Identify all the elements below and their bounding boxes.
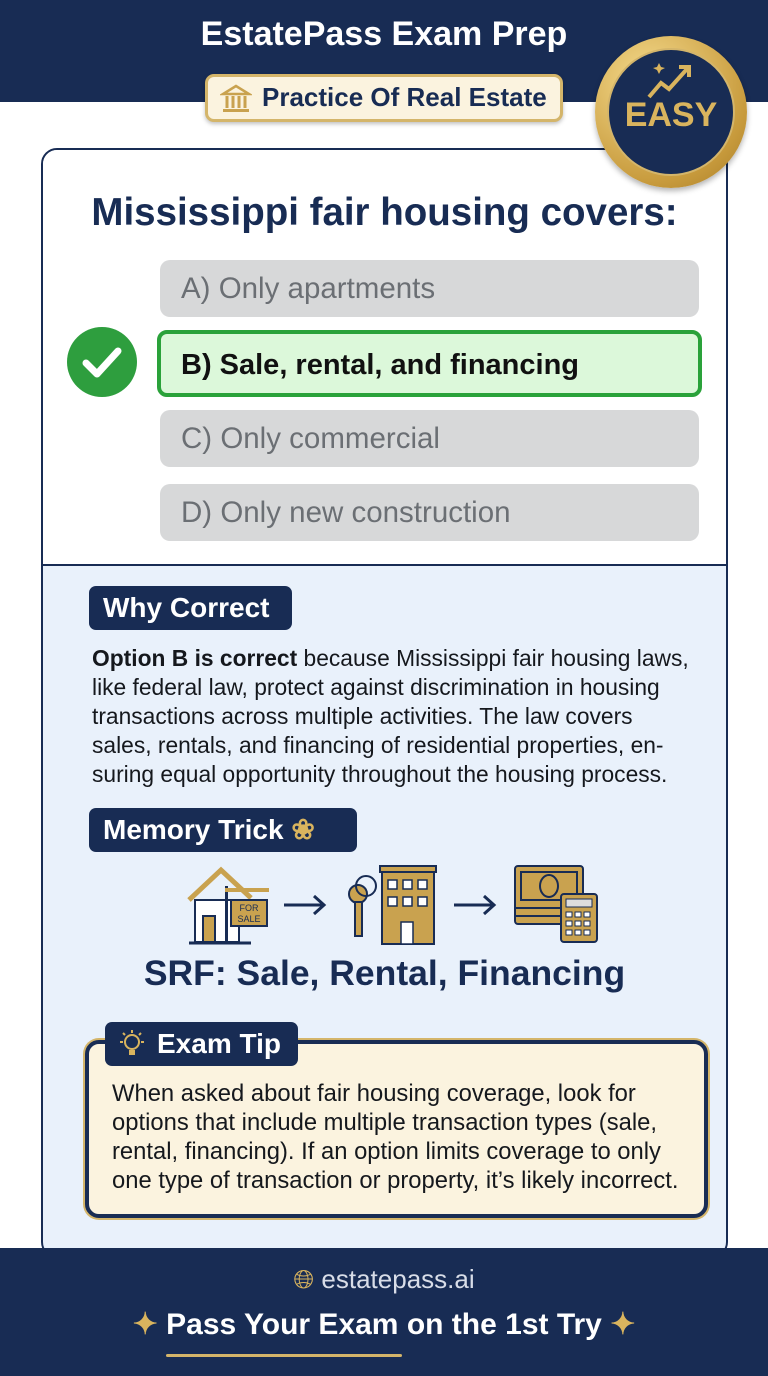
website: 🌐︎ estatepass.ai (293, 1264, 475, 1294)
exam tip label: Exam Tip (157, 1028, 281, 1059)
icon: check (67, 327, 137, 397)
option C: C) Only commercial (181, 422, 440, 455)
icons row (187, 865, 598, 945)
category pill (205, 74, 563, 122)
why correct label: Why Correct (103, 592, 269, 623)
header band (0, 0, 768, 102)
card (41, 148, 728, 1258)
tip text: one type of transaction or property, it’s likely incorrect. (112, 1167, 679, 1194)
tip text: rental, financing). If an option limits coverage to only (112, 1138, 661, 1165)
explanation: suring equal opportunity throughout the housing process. (92, 761, 667, 787)
arrow (454, 894, 496, 915)
mnemonic: SRF: Sale, Rental, Financing (144, 953, 625, 993)
option B correct: B) Sale, rental, and financing (181, 349, 579, 381)
option B correct (157, 330, 702, 397)
icon: house for sale: FOR (240, 903, 259, 913)
option A: A) Only apartments (181, 272, 435, 305)
badge: EASY: EASY (625, 96, 717, 134)
footer (0, 1248, 768, 1376)
category pill: Practice Of Real Estate (262, 82, 547, 112)
explanation: sales, rentals, and financing of residential properties, en- (92, 732, 664, 758)
option C (160, 410, 699, 467)
slogan: ✦ Pass Your Exam on the 1st Try ✦ (133, 1308, 635, 1341)
exam tip label (105, 1022, 298, 1066)
title: EstatePass Exam Prep (201, 15, 567, 53)
option D (160, 484, 699, 541)
explanation: like federal law, protect against discrimination in housing (92, 674, 660, 700)
why correct label (89, 586, 292, 630)
arrow (284, 894, 326, 915)
option D: D) Only new construction (181, 496, 511, 529)
icon: house for sale (187, 866, 269, 944)
icon: bank (220, 84, 252, 112)
tip text: When asked about fair housing coverage, look for (112, 1080, 636, 1107)
question: Mississippi fair housing covers: (91, 191, 678, 234)
option A (160, 260, 699, 317)
memory trick label (89, 808, 357, 852)
icon: key and building (348, 865, 437, 945)
icon: bulb (120, 1030, 144, 1055)
explanation: transactions across multiple activities. The law covers (92, 703, 633, 729)
explanation: Option B is correct because Mississippi fair housing laws, (92, 645, 689, 671)
tip text: options that include multiple transaction types (sale, (112, 1109, 657, 1136)
exam tip box (85, 1040, 708, 1218)
badge: EASY (595, 36, 747, 188)
explanation (92, 645, 689, 787)
icon: money and calculator (514, 865, 598, 943)
icon: house for sale: SALE (237, 914, 261, 924)
memory trick label: Memory Trick ❀ (103, 814, 315, 845)
tip text (112, 1080, 679, 1194)
